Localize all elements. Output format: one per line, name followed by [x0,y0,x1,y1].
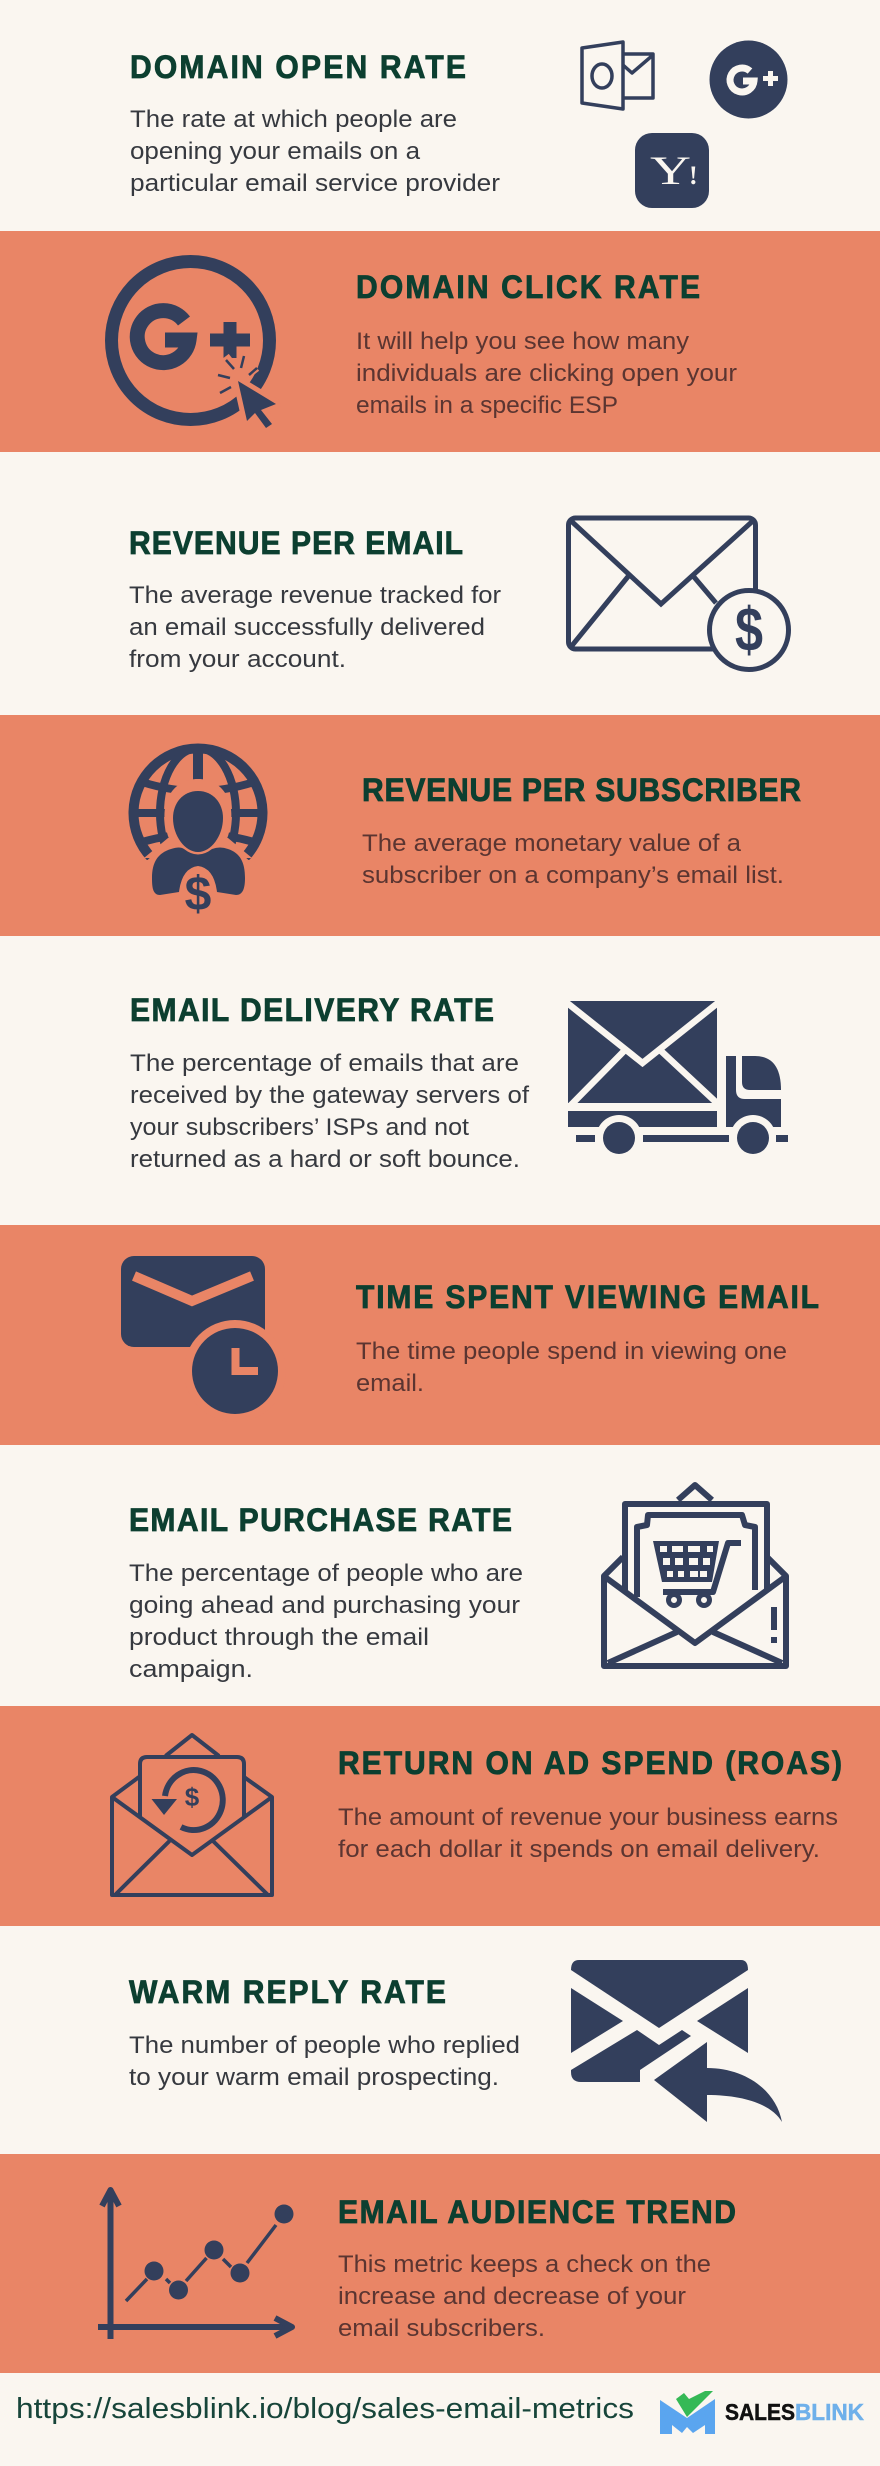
text block: email audience trend description [338,2251,711,2342]
text block: email audience trend description: increase and decrease of your [338,2283,686,2310]
logo: salesblink: SALES [725,2399,795,2425]
panel: email delivery rate [0,936,880,1225]
text block: email purchase rate description: The percentage of people who are [129,1560,523,1587]
text block: email delivery rate description: received by the gateway servers of [130,1082,529,1109]
panel: domain open rate [0,0,880,231]
text block: domain open rate description: The rate at which people are [130,106,457,133]
panel: email purchase rate [0,1445,880,1706]
panel: warm reply rate [0,1926,880,2154]
text block: revenue per email description: an email successfully delivered [129,614,485,641]
icon: yahoo badge [635,133,709,208]
icon: envelope with money return [112,1735,272,1895]
text block: email audience trend description: email subscribers. [338,2315,545,2342]
heading: warm reply rate: WARM REPLY RATE [129,1974,446,2010]
heading: revenue per email: REVENUE PER EMAIL [129,525,463,561]
text block: warm reply rate description: The number of people who replied [129,2032,520,2059]
panel: footer [0,2373,880,2466]
icon: envelope with clock [121,1256,286,1422]
icon: google plus click cursor [112,262,276,428]
text block: domain open rate description [130,106,500,197]
panel: revenue per subscriber [0,715,880,936]
icon: envelope with dollar coin [568,518,788,670]
heading: domain click rate: DOMAIN CLICK RATE [356,269,700,305]
text block: return on ad spend description: The amount of revenue your business earns [338,1804,838,1831]
text block: email purchase rate description [129,1560,523,1683]
icon: envelope with shopping cart [604,1485,786,1666]
icon: envelope with money return: $ [185,1782,200,1812]
icon: google plus badge [710,40,788,118]
icon: yahoo badge: ! [689,161,698,190]
text block: revenue per subscriber description: subscriber on a company’s email list. [362,862,784,889]
text block: email purchase rate description: going ahead and purchasing your [129,1592,520,1619]
icon: globe subscriber with dollar: $ [185,868,212,921]
heading: time spent viewing email: TIME SPENT VIEWING EMAIL [356,1279,819,1315]
text block: email delivery rate description: The percentage of emails that are [130,1050,519,1077]
text block: email delivery rate description: returned as a hard or soft bounce. [130,1146,520,1173]
text block: revenue per email description [129,582,501,673]
text block: time spent viewing email description: email. [356,1370,424,1397]
icon: outlook [582,42,653,109]
text block: email purchase rate description: product through the email [129,1624,429,1651]
text block: domain click rate description: emails in a specific ESP [356,392,618,419]
logo: salesblink: BLINK [795,2399,864,2425]
panel: time spent viewing email [0,1225,880,1445]
text block: warm reply rate description [129,2032,520,2091]
text block: domain click rate description: individuals are clicking open your [356,360,737,387]
text block: warm reply rate description: to your warm email prospecting. [129,2064,499,2091]
heading: revenue per subscriber: REVENUE PER SUBSCRIBER [362,772,801,808]
text block: domain click rate description [356,328,737,419]
icon: envelope with dollar coin: $ [735,596,763,665]
text block: email delivery rate description [130,1050,529,1173]
text block: revenue per email description: from your account. [129,646,346,673]
text block: time spent viewing email description: The time people spend in viewing one [356,1338,787,1365]
text block: revenue per email description: The average revenue tracked for [129,582,501,609]
text block: domain click rate description: It will help you see how many [356,328,689,355]
panel: email audience trend [0,2154,880,2373]
source url: https://salesblink.io/blog/sales-email-metrics [16,2393,634,2425]
panel: revenue per email [0,452,880,715]
icon: yahoo badge: Y [650,148,691,193]
text block: domain open rate description: opening your emails on a [130,138,421,165]
text block: email purchase rate description: campaign. [129,1656,253,1683]
panel: domain click rate [0,231,880,452]
chart: trend line with axes [98,2190,294,2339]
text block: time spent viewing email description [356,1338,787,1397]
icon: envelope with reply arrow [571,1960,782,2122]
text block: domain open rate description: particular email service provider [130,170,500,197]
logo: salesblink [660,2391,864,2434]
text block: email audience trend description: This metric keeps a check on the [338,2251,711,2278]
icon: email delivery truck [566,1001,788,1161]
heading: email delivery rate: EMAIL DELIVERY RATE [130,992,494,1028]
text block: revenue per subscriber description [362,830,784,889]
heading: email purchase rate: EMAIL PURCHASE RATE [129,1502,512,1538]
text block: return on ad spend description [338,1804,838,1863]
heading: domain open rate: DOMAIN OPEN RATE [130,49,466,85]
panel: return on ad spend [0,1706,880,1926]
text block: revenue per subscriber description: The average monetary value of a [362,830,742,857]
icon: globe subscriber with dollar [125,748,270,922]
text block: email delivery rate description: your subscribers’ ISPs and not [130,1114,469,1141]
heading: return on ad spend: RETURN ON AD SPEND (ROAS) [338,1745,842,1781]
heading: email audience trend: EMAIL AUDIENCE TREND [338,2194,736,2230]
text block: return on ad spend description: for each dollar it spends on email delivery. [338,1836,820,1863]
